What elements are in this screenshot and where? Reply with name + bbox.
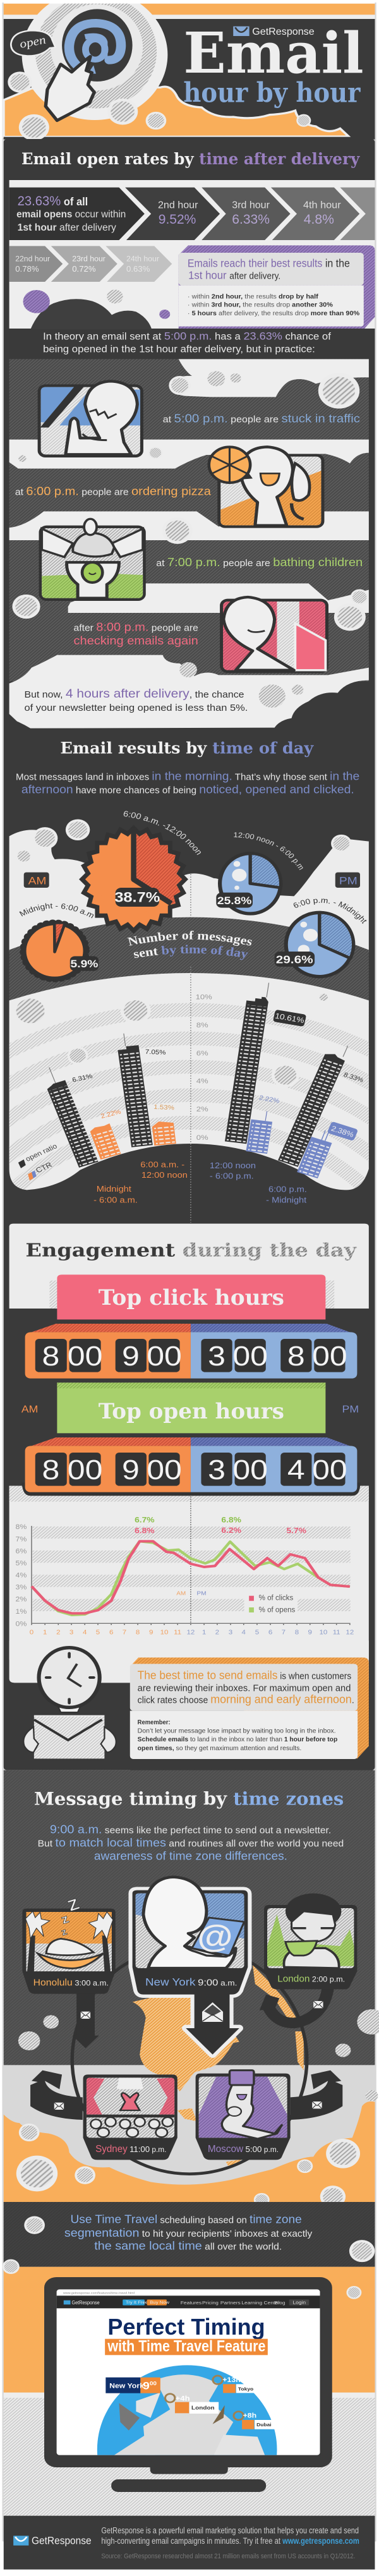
intro: time zones	[38, 1823, 344, 1863]
chevron: fading	[340, 188, 375, 240]
header banner	[4, 0, 375, 141]
chevron: 22nd hour	[9, 246, 63, 282]
pie: midnight to 6am: 5.9%	[71, 958, 98, 970]
promo heading: Perfect Timing	[107, 2315, 265, 2340]
hatched scene background	[9, 359, 369, 681]
label: plus 13 hours Tokyo: +13h	[222, 2377, 241, 2384]
line chart: clicks and opens: 6.8%	[135, 1527, 155, 1535]
chart: messages skyline	[9, 967, 369, 1319]
callout: best time: open times, so they get maximum attention and results.	[138, 1745, 301, 1752]
header bubbles	[8, 71, 311, 140]
card: Sydney	[83, 2074, 177, 2160]
line chart: clicks and opens: 12	[187, 1629, 195, 1636]
line chart: clicks and opens: 7	[123, 1629, 126, 1636]
nav bar: Pricing	[202, 2301, 219, 2306]
axis labels: 6%	[196, 1049, 208, 1057]
time labels under dome: - Midnight	[266, 1195, 306, 1204]
open speech bubble: open	[18, 33, 47, 51]
callout: best time: The best time to send emails is when customers	[138, 1669, 351, 1682]
card: New York: New York 9:00 a.m.	[145, 1976, 237, 1988]
panel: use time travel: Use Time Travel scheduling based on time zone	[71, 2213, 302, 2226]
line chart: clicks and opens: 3	[69, 1629, 73, 1636]
panel: chart panel end	[9, 1641, 369, 1683]
pie: 6am to noon star: 38.7%	[114, 890, 160, 905]
line chart: clicks and opens: 2%	[16, 1596, 27, 1603]
line chart: clicks and opens: 9	[149, 1629, 153, 1636]
board: click hours: 3	[208, 1341, 226, 1371]
loop arrow: Sydney	[30, 2071, 83, 2120]
banner: top open hours	[57, 1382, 325, 1433]
nav bar: Buy Now	[150, 2300, 170, 2305]
envelope icons	[54, 2101, 322, 2110]
board: click hours: 9	[122, 1341, 140, 1371]
time labels under dome: 6:00 a.m. -	[140, 1160, 184, 1169]
chevron: 3rd hour	[202, 188, 291, 240]
chevron: 1st hour: 1st hour after delivery	[18, 222, 117, 233]
callout 2.38: 2.38%	[330, 1124, 355, 1139]
value labels	[71, 1048, 364, 1120]
label: New York time: 9	[143, 2380, 150, 2392]
icon: clock on envelope	[23, 1648, 116, 1758]
bubbles near pies	[18, 819, 352, 862]
chevron: 22nd hour: 0.78%	[15, 265, 39, 274]
building: evening open	[278, 1041, 351, 1167]
axis labels: 4%	[196, 1077, 208, 1085]
cloud band 3	[9, 511, 369, 544]
line chart: clicks and opens: 10	[160, 1629, 168, 1636]
GetResponse logo: GetResponse	[252, 25, 315, 37]
open speech bubble	[11, 30, 56, 56]
globe	[97, 2365, 277, 2455]
cloud band 2	[9, 440, 369, 469]
callout 10.61: 10.61%	[274, 1011, 306, 1025]
intro text	[16, 770, 359, 796]
line chart: clicks and opens: 6%	[16, 1548, 27, 1555]
callout: best results: Emails reach their best results in the	[188, 257, 350, 270]
banner: top open hours: Top open hours	[99, 1399, 284, 1424]
value labels: 6.31%	[71, 1073, 93, 1084]
building: midnight CTR	[89, 1123, 121, 1159]
line chart: clicks and opens: 3	[229, 1629, 232, 1636]
line chart: clicks and opens: 2	[215, 1629, 219, 1636]
monitor	[44, 2277, 361, 2534]
hatched background: time zones	[4, 1770, 375, 2065]
axis labels: 2%	[196, 1105, 208, 1113]
chevron: 24th hour: 0.63%	[126, 265, 150, 274]
time labels under dome: - 6:00 p.m.	[210, 1172, 254, 1180]
building: morning CTR	[152, 1120, 176, 1146]
theory text	[43, 330, 331, 354]
section: best time	[4, 1641, 375, 2065]
pie: 6pm to midnight: 29.6%	[276, 953, 313, 966]
chevron: 4th hour: 4th hour	[303, 199, 341, 210]
time labels under dome	[93, 1160, 307, 1204]
messages heading on arc: Number of messages	[127, 931, 252, 946]
panel: chart background	[9, 1486, 369, 1660]
time labels under dome: Midnight	[97, 1185, 131, 1194]
label: plus 13 hours Tokyo	[213, 2376, 258, 2393]
curved time labels	[19, 811, 366, 924]
ring arrow	[72, 1945, 307, 2174]
section: results by time of day	[9, 739, 369, 1001]
center line upper	[190, 874, 192, 917]
AM badge: AM	[28, 875, 46, 886]
text: checking emails	[74, 621, 198, 648]
pie: noon to 6pm: 25.8%	[217, 895, 251, 907]
text: checking emails: after 8:00 p.m. people are	[74, 621, 198, 634]
board: open hours: 4	[287, 1454, 305, 1485]
PM badge: PM	[339, 875, 358, 886]
panel: use time travel: segmentation to hit your recipients’ inboxes at exactly	[64, 2227, 312, 2240]
footer	[4, 2516, 375, 2570]
line chart: clicks and opens: 11	[174, 1629, 181, 1636]
line chart: clicks and opens: 8	[136, 1629, 140, 1636]
nav bar: Partners	[220, 2301, 241, 2306]
line chart: clicks and opens: 4	[83, 1629, 87, 1636]
curved time labels: 6:00 p.m. - Midnight	[293, 898, 366, 924]
callout: best results: 1st hour after delivery.	[188, 269, 280, 282]
PM badge	[335, 873, 360, 888]
loop arrow: Moscow	[291, 2071, 342, 2120]
rings behind at sign	[22, 0, 167, 120]
callout: best results: · 5 hours after delivery, the results drop more than 90%	[188, 310, 359, 317]
intro: time zones: 9:00 a.m. seems like the perfect time to send out a newsletter.	[50, 1823, 331, 1836]
label: plus 4 hours London: +4h	[176, 2394, 190, 2402]
line chart: clicks and opens: 6.2%	[221, 1526, 241, 1535]
callout: best time: Don’t let your message lose impact by waiting too long in the inbox.	[138, 1727, 336, 1734]
line chart: clicks and opens: % of clicks	[259, 1593, 293, 1602]
line chart: clicks and opens: AM	[176, 1590, 186, 1597]
promo subheading: with Time Travel Feature	[107, 2337, 265, 2355]
arrow: Honolulu down	[73, 1992, 99, 2048]
line chart: clicks and opens: 0	[30, 1629, 33, 1636]
line chart: clicks and opens: 1	[43, 1629, 47, 1636]
card: London	[264, 1894, 357, 1989]
time labels under dome: - 6:00 a.m.	[93, 1195, 138, 1204]
chevron: 4th hour	[271, 188, 359, 240]
nav bar: Learning Center	[241, 2301, 280, 2306]
line chart: clicks and opens: 9	[308, 1629, 312, 1636]
time labels under dome: 6:00 p.m.	[268, 1185, 307, 1194]
axis labels: 8%	[196, 1021, 208, 1029]
intro text: afternoon have more chances of being noticed, opened and clicked.	[21, 783, 354, 796]
scene: bathing children	[39, 519, 146, 601]
address bar: www.getresponse.com/features/time-travel.html	[63, 2292, 135, 2295]
line chart: clicks and opens: 5	[96, 1629, 100, 1636]
line chart: clicks and opens: 4%	[16, 1572, 27, 1579]
line chart: clicks and opens: 7%	[16, 1536, 27, 1543]
AM label: AM	[21, 1404, 38, 1415]
line chart: clicks and opens: 3%	[16, 1584, 27, 1591]
legend: open ratio	[25, 1143, 59, 1163]
building: midnight open	[40, 1065, 99, 1168]
curved time labels: Midnight - 6:00 a.m.	[19, 904, 93, 919]
cloud band 1	[169, 359, 369, 409]
label: New York time: 00	[150, 2381, 157, 2386]
label: plus 4 hours London	[165, 2394, 219, 2414]
line chart: clicks and opens: 12	[346, 1629, 354, 1636]
orange ground and lower bubbles	[4, 1945, 379, 2208]
at sign	[69, 23, 121, 74]
text: 4 hours after delivery: But now, 4 hours after delivery, the chance	[24, 687, 244, 701]
panel: use time travel: the same local time all over the world.	[94, 2240, 282, 2252]
nav bar: Try It Free	[126, 2300, 148, 2305]
chevron: 23rd hour: 23rd hour	[72, 254, 106, 263]
bubbles field	[16, 2009, 379, 2208]
pie: midnight to 6am	[24, 923, 99, 979]
line chart: clicks and opens: 1%	[16, 1609, 27, 1616]
section: top hours	[9, 1324, 369, 1660]
dome	[9, 973, 369, 1190]
card: New York: @	[197, 1919, 233, 1954]
orange wave	[4, 87, 349, 137]
cloud band 4	[12, 583, 369, 631]
text: 4 hours after delivery: of your newsletter being opened is less than 5%.	[24, 703, 248, 713]
card: Moscow	[196, 2071, 291, 2160]
card: Honolulu: z	[59, 1926, 69, 1938]
value labels: 2.22%	[258, 1094, 280, 1105]
board: click hours: 00	[147, 1341, 182, 1371]
callout: best time: are reviewing their inboxes. For maximum open and	[138, 1684, 351, 1693]
dark wedge under dome	[9, 1133, 369, 1224]
footer logo: GetResponse	[32, 2535, 92, 2546]
value labels: 8.33%	[342, 1072, 364, 1084]
callout: best time: Schedule emails to land in the inbox no later than 1 hour before top	[138, 1736, 338, 1743]
footer text	[101, 2525, 359, 2546]
scene: checking emails	[220, 597, 328, 673]
chevron: 24th hour	[105, 246, 172, 282]
footer logo	[13, 2535, 92, 2546]
building: afternoon open	[225, 981, 271, 1144]
chevron: 2nd hour: 9.52%	[159, 212, 196, 227]
text: checking emails: checking emails again	[74, 634, 198, 648]
board: click hours: 00	[312, 1341, 347, 1371]
north america map	[133, 1965, 304, 2168]
board: open hours: 9	[122, 1454, 140, 1485]
line chart: clicks and opens: 4	[242, 1629, 246, 1636]
center line	[190, 967, 192, 1223]
chevron: 23rd hour: 0.72%	[72, 265, 96, 274]
intro text: Most messages land in inboxes in the morning. That’s why those sent in the	[16, 770, 359, 783]
section: city cards	[22, 1877, 357, 2055]
dome bands	[9, 1003, 369, 1190]
callout: best time	[130, 1657, 369, 1759]
label: plus 8 hours Dubai: Dubai	[256, 2422, 272, 2428]
callout: best time: click rates choose morning and early afternoon.	[138, 1693, 354, 1706]
board: open hours: 00	[68, 1454, 102, 1485]
callout 2.38	[327, 1122, 358, 1141]
hatch overlay	[4, 1770, 375, 2065]
board: open hours: 3	[208, 1454, 226, 1485]
heading: engagement: Engagement during the day	[25, 1240, 357, 1261]
legend: CTR	[34, 1161, 54, 1175]
callout: best results	[179, 245, 375, 329]
messages heading on arc: sent by time of day	[134, 945, 248, 960]
banner: top click hours: Top click hours	[99, 1285, 284, 1310]
main dark panel	[4, 139, 375, 1770]
board: open hours: 00	[147, 1454, 182, 1485]
line chart: clicks and opens: 6	[109, 1629, 113, 1636]
line chart: clicks and opens: 8%	[16, 1524, 27, 1531]
orange ground	[4, 2101, 375, 2203]
theory text: In theory an email sent at 5:00 p.m. has a 23.63% chance of	[43, 330, 331, 342]
text: bathing children: at 7:00 p.m. people are bathing children	[156, 556, 363, 569]
line chart: clicks and opens: 8	[295, 1629, 299, 1636]
line chart: clicks and opens: 6.8%	[221, 1515, 241, 1524]
text: 4 hours after delivery	[24, 662, 303, 713]
hatch stripe under board	[9, 1486, 369, 1502]
hatched floor	[4, 2398, 375, 2516]
label: plus 8 hours Dubai: +8h	[243, 2412, 256, 2419]
board: open hours: 00	[232, 1454, 268, 1485]
orange screen backdrop	[4, 2267, 375, 2393]
card: Honolulu	[22, 1896, 116, 1994]
section: in practice scenes	[9, 330, 369, 729]
hatch beside pink banner	[49, 1281, 334, 1309]
chevron: 1st hour: 23.63% of all	[18, 193, 88, 209]
curved time labels: 12:00 noon - 6:00 p.m.	[234, 832, 303, 870]
board: click hours: 8	[42, 1341, 59, 1371]
line chart: clicks and opens: 7	[282, 1629, 286, 1636]
intro: time zones: awareness of time zone differences.	[94, 1850, 287, 1863]
axis labels: 0%	[196, 1134, 208, 1142]
time labels under dome: 12:00 noon	[141, 1171, 188, 1180]
building: evening CTR	[297, 1125, 337, 1178]
card: Honolulu: Honolulu 3:00 a.m.	[33, 1978, 109, 1988]
panel: open rate chevrons	[9, 180, 375, 330]
line chart: clicks and opens: 5%	[16, 1560, 27, 1567]
theory text: being opened in the 1st hour after delivery, but in practice:	[43, 343, 315, 354]
value labels: 1.53%	[153, 1104, 175, 1111]
callout: best time: Remember:	[138, 1719, 171, 1726]
chevron: 2nd hour	[125, 188, 220, 240]
section: lower city cards	[4, 2071, 375, 2267]
pointing hand	[45, 56, 94, 121]
floor light strip	[4, 2393, 375, 2398]
board: open hours: 00	[312, 1454, 347, 1485]
board: click hours: 00	[232, 1341, 268, 1371]
board: click hours	[25, 1324, 357, 1379]
axis labels: 10%	[196, 993, 212, 1001]
hatched arc band	[9, 917, 369, 1019]
line chart: clicks and opens: 10	[320, 1629, 327, 1636]
line chart: clicks and opens: 2	[56, 1629, 61, 1636]
light cloud behind pies	[9, 830, 369, 952]
heading: results: Email results by time of day	[60, 739, 314, 758]
chevron: 4th hour: 4.8%	[304, 212, 334, 227]
callout: best results: · within 3rd hour, the results drop another 30%	[188, 301, 333, 308]
line chart: clicks and opens: 6	[268, 1629, 272, 1636]
card: Honolulu: Z	[65, 1896, 82, 1914]
panel: use time travel	[4, 2202, 375, 2267]
scene: ordering pizza	[209, 447, 324, 528]
chevron: 24th hour: 24th hour	[126, 254, 160, 263]
panel: engagement	[9, 1224, 369, 1309]
text: ordering pizza: at 6:00 p.m. people are ordering pizza	[15, 485, 212, 498]
bubbles on dark panel	[24, 2216, 375, 2262]
label: plus 4 hours London: London	[191, 2405, 215, 2410]
line chart: clicks and opens: 6.7%	[135, 1515, 155, 1524]
intro: time zones: But to match local times and routines all over the world you need	[38, 1837, 344, 1849]
card: London: London 2:00 p.m.	[277, 1974, 345, 1984]
curved time labels: 6:00 a.m. -12:00 noon	[124, 811, 201, 856]
chevron: 1st hour: email opens occur within	[16, 209, 126, 220]
line chart: clicks and opens: 11	[333, 1629, 340, 1636]
legend	[18, 1143, 59, 1180]
nav bar: Features	[181, 2301, 202, 2306]
time labels under dome: 12:00 noon	[210, 1161, 256, 1170]
dark right cover	[130, 1683, 373, 1771]
nav bar	[57, 2295, 320, 2308]
chevron: 3rd hour: 3rd hour	[232, 199, 270, 210]
pie: noon to 6pm	[216, 854, 281, 914]
line chart: clicks and opens: 5	[255, 1629, 259, 1636]
AM badge	[24, 873, 49, 888]
chevron: 3rd hour: 6.33%	[232, 212, 270, 227]
board: click hours: 00	[68, 1341, 102, 1371]
card: Moscow: Moscow 5:00 p.m.	[208, 2143, 279, 2155]
scene: stuck in traffic	[38, 381, 143, 457]
GetResponse logo	[233, 25, 315, 37]
nav bar: Login	[292, 2300, 306, 2306]
label: New York time: New York	[109, 2383, 145, 2390]
line chart: clicks and opens: PM	[197, 1590, 207, 1597]
building: afternoon CTR	[246, 1110, 274, 1154]
building: morning open	[116, 1032, 153, 1147]
dome bubbles	[12, 994, 328, 1087]
chevron: 22nd hour: 22nd hour	[15, 254, 51, 263]
heading: time zones: Message timing by time zones	[34, 1789, 344, 1810]
pie: 6pm to midnight	[275, 912, 354, 977]
axis labels	[196, 993, 212, 1142]
nav bar: GetResponse	[71, 2300, 100, 2306]
nav bar: Blog	[275, 2301, 286, 2306]
board: click hours: 8	[287, 1341, 305, 1371]
loop arrow: London	[260, 1988, 328, 2023]
board: open hours	[22, 1437, 360, 1496]
messages heading on arc	[127, 931, 252, 960]
dark hills and dots	[23, 289, 170, 330]
value labels: 7.05%	[145, 1048, 166, 1056]
line chart: clicks and opens: 5.7%	[286, 1527, 307, 1535]
line chart: clicks and opens: % of opens	[259, 1605, 295, 1614]
chevron: 23rd hour	[51, 246, 117, 282]
bubble at orange edge	[3, 2259, 20, 2274]
PM label: PM	[342, 1404, 359, 1415]
card: Honolulu: z	[59, 1912, 71, 1926]
text: stuck in traffic: at 5:00 p.m. people are stuck in traffic	[163, 413, 360, 425]
line chart: clicks and opens	[16, 1496, 354, 1636]
line chart: clicks and opens: 1	[202, 1629, 206, 1636]
chevron: 1st hour	[9, 188, 145, 240]
callout: best results: · within 2nd hour, the results drop by half	[188, 293, 318, 300]
card: New York	[133, 1877, 248, 2055]
lower cloud	[9, 655, 369, 729]
pie: 6am to noon star	[79, 833, 188, 934]
label: plus 13 hours Tokyo: Tokyo	[238, 2386, 253, 2392]
banner: top click hours	[57, 1274, 325, 1319]
board: open hours: 8	[42, 1454, 59, 1485]
chevron: 2nd hour: 2nd hour	[158, 199, 198, 210]
card: Sydney: Sydney 11:00 p.m.	[95, 2143, 166, 2155]
value labels: 2.22%	[100, 1108, 122, 1120]
label: plus 8 hours Dubai	[234, 2412, 276, 2429]
label: New York time	[105, 2378, 160, 2393]
line chart: clicks and opens: 0%	[16, 1621, 27, 1628]
